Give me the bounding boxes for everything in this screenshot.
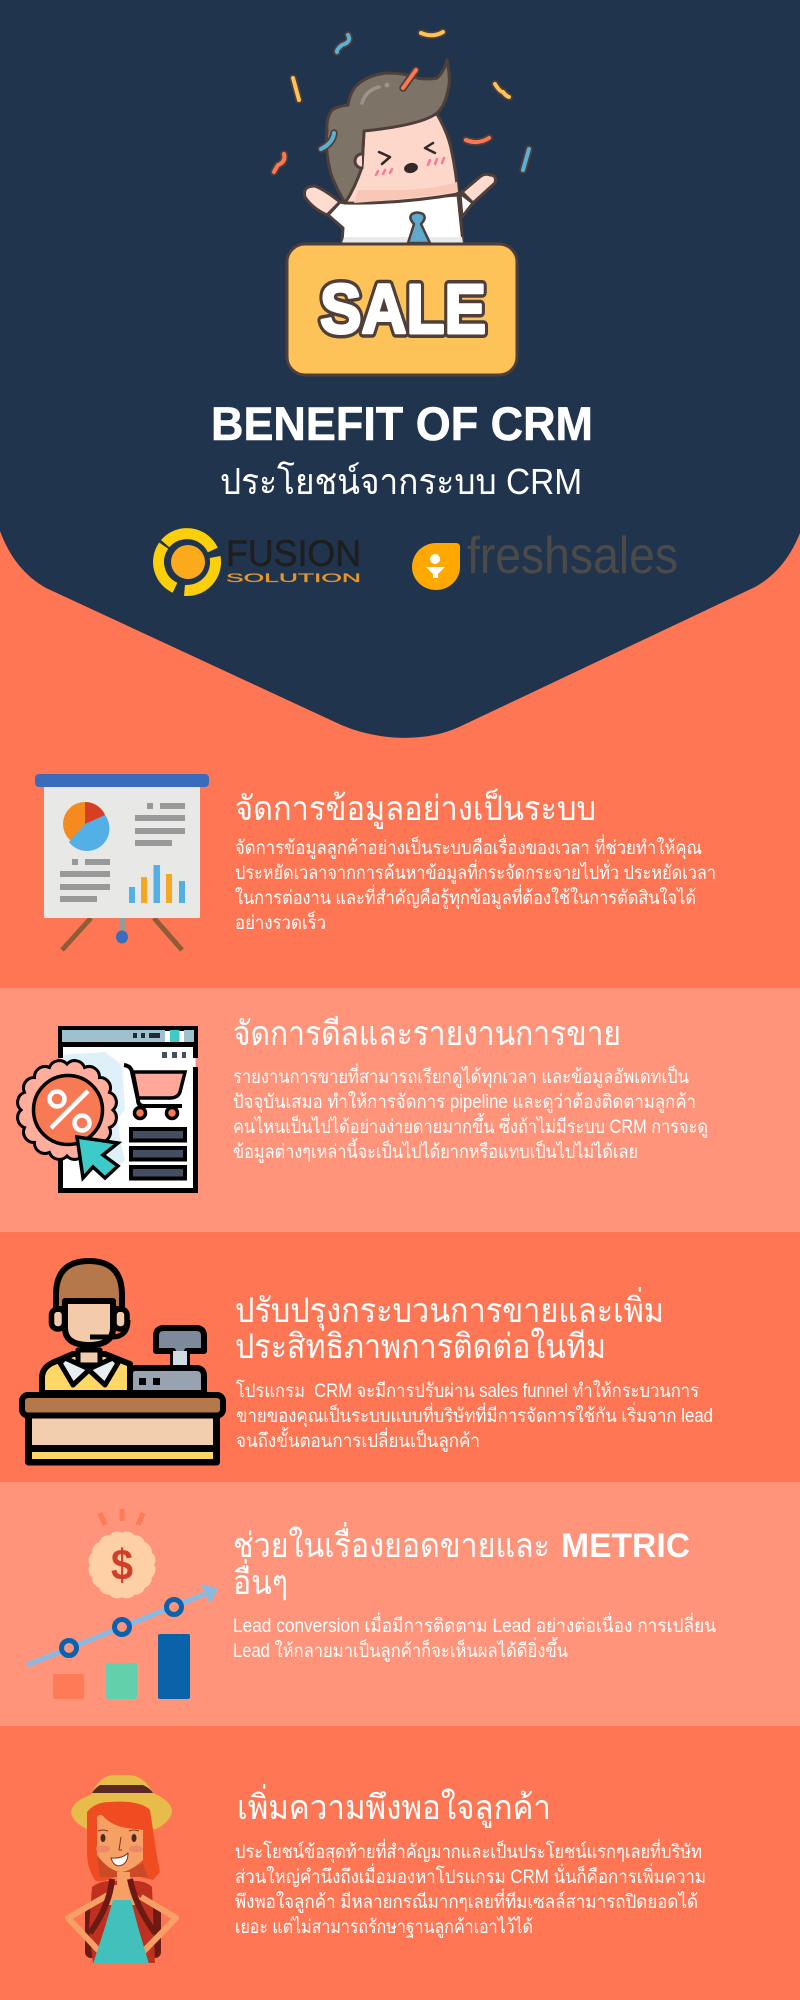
section 5 text: ประโยชน์ข้อสุดท้ายที่สำคัญมากและเป็นประโยชน์แรกๆเลยที่บริษัท	[235, 1838, 702, 1864]
section 3 heading	[235, 1287, 664, 1366]
section 2 text: ข้อมูลต่างๆเหล่านี้จะเป็นไปได้ยากหรือแทบเป็นไปไม่ได้เลย	[233, 1138, 638, 1163]
section 4 heading	[233, 1522, 690, 1602]
confetti	[274, 32, 529, 172]
icon: sales report window	[18, 1028, 198, 1190]
section 1 text: จัดการข้อมูลลูกค้าอย่างเป็นระบบคือเรื่องของเวลา ที่ช่วยทำให้คุณ	[235, 834, 702, 860]
badge	[18, 1061, 116, 1159]
icon: presentation board	[35, 774, 209, 950]
section 2 text: รายงานการขายที่สามารถเรียกดูได้ทุกเวลา และข้อมูลอัพเดทเป็น	[233, 1063, 689, 1089]
section 5 text: เยอะ แต่ไม่สามารถรักษาฐานลูกค้าเอาไว้ได้	[235, 1916, 533, 1938]
section 2 text: คนไหนเป็นไปได้อย่างง่ายดายมากขึ้น ซึ่งถ้าไม่มีระบบ CRM การจะดู	[233, 1113, 708, 1138]
sale label: SALE	[320, 270, 486, 348]
section 2 text	[233, 1063, 708, 1163]
section 4 heading: ช่วยในเรื่องยอดขายและ	[233, 1522, 550, 1565]
section 1 text: ประหยัดเวลาจากการค้นหาข้อมูลที่กระจัดกระจายไปทั่ว ประหยัดเวลา	[235, 859, 716, 884]
section 3 text: โปรแกรม CRM จะมีการปรับผ่าน sales funnel ทำให้กระบวนการ	[236, 1379, 699, 1402]
section 2 heading: จัดการดีลและรายงานการขาย	[233, 1015, 621, 1053]
section 4 heading: METRIC	[561, 1527, 690, 1565]
sale label: SALE	[320, 270, 486, 348]
icon: call centre agent at desk	[22, 1261, 223, 1462]
section 1 text: ในการต่องาน และที่สำคัญคือรู้ทุกข้อมูลที่ต้องใช้ในการตัดสินใจได้	[235, 884, 696, 910]
logo: fusion solution: FUSION	[226, 533, 361, 574]
section 4 text: Lead conversion เมื่อมีการติดตาม Lead อย่างต่อเนื่อง การเปลี่ยน	[233, 1612, 716, 1637]
section 1 text	[235, 834, 716, 934]
section 3 text: จนถึงขั้นตอนการเปลี่ยนเป็นลูกค้า	[236, 1427, 480, 1452]
icon: growth chart with dollar badge	[27, 1509, 217, 1699]
section 3 text: ขายของคุณเป็นระบบแบบที่บริษัทที่มีการจัดการใช้กัน เริ่มจาก lead	[236, 1402, 713, 1428]
icon: growth chart with dollar badge: $	[111, 1541, 133, 1590]
section 3 heading: ประสิทธิภาพการติดต่อในทีม	[235, 1327, 606, 1366]
section 2 text: ปัจจุบันเสมอ ทำให้การจัดการ pipeline และดูว่าต้องติดตามลูกค้า	[233, 1091, 696, 1114]
section 3 text	[236, 1379, 713, 1452]
icon: traveller woman	[68, 1775, 176, 1964]
section 5 heading: เพิ่มความพึงพอใจลูกค้า	[237, 1784, 551, 1828]
icon: sale character	[287, 60, 517, 375]
logo: freshsales	[412, 527, 678, 590]
subtitle: ประโยชน์จากระบบ CRM	[220, 461, 582, 502]
section 1 text: อย่างรวดเร็ว	[235, 910, 326, 934]
section 5 text: ส่วนใหญ่คำนึงถึงเมื่อมองหาโปรแกรม CRM นั่นก็คือการเพิ่มความ	[235, 1863, 706, 1888]
section 4 heading: อื่นๆ	[233, 1559, 288, 1602]
logo: fusion solution: SOLUTION	[226, 571, 361, 585]
title: BENEFIT OF CRM	[211, 397, 593, 450]
section 5 text	[235, 1838, 706, 1938]
section 3 heading: ปรับปรุงกระบวนการขายและเพิ่ม	[235, 1287, 664, 1331]
header panel	[0, 0, 800, 738]
section 1 heading: จัดการข้อมูลอย่างเป็นระบบ	[235, 788, 596, 829]
logo: fusion solution	[159, 533, 361, 591]
section 4 text: Lead ให้กลายมาเป็นลูกค้าก็จะเห็นผลได้ดียิ่งขึ้น	[233, 1637, 568, 1662]
section 5 text: พึงพอใจลูกค้า มีหลายกรณีมากๆเลยที่ทีมเซลล์สามารถปิดยอดได้	[235, 1888, 698, 1913]
section 4 text	[233, 1612, 716, 1662]
logo: freshsales: freshsales	[467, 527, 678, 585]
